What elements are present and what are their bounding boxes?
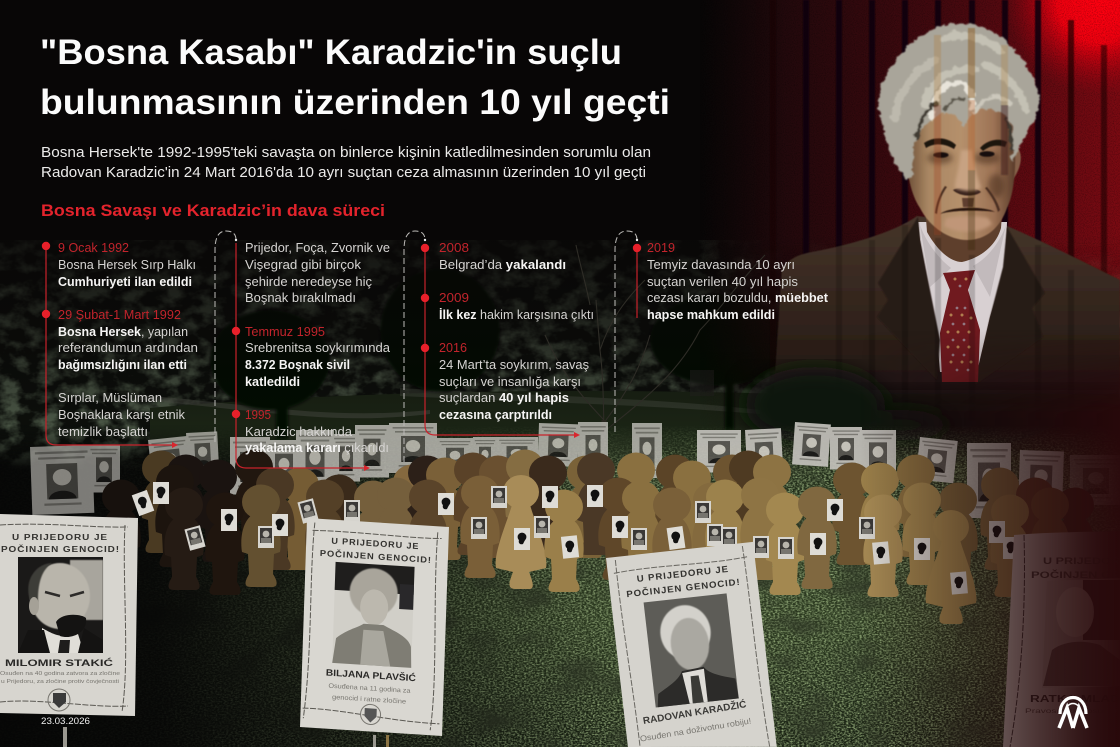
timeline column 2: şehirde neredeyse hiç [245,274,372,289]
timeline connectors [46,231,638,471]
timeline column 4: hapse mahkum edildi [647,307,775,322]
suit shadow fade at bottom [760,390,1120,470]
collar [920,225,1006,297]
poster: Biljana Plavšić: BILJANA PLAVŠIĆ [326,667,416,683]
title: bulunmasının üzerinden 10 yıl geçti [40,83,670,122]
timeline column 3: İlk kez hakim karşısına çıktı [439,307,594,322]
timeline column 4: 2019 [647,240,675,255]
shirt [918,222,1007,372]
timeline column 4 [647,240,829,322]
neck [925,200,1003,262]
timeline column 3: 24 Mart’ta soykırım, savaş [439,357,589,372]
photo [644,593,739,707]
timeline column 3: 2008 [439,240,469,255]
timeline column 2: 1995 [245,407,271,422]
timeline column 1: Cumhuriyeti ilan edildi [58,274,192,289]
timeline column 2: Srebrenitsa soykırımında [245,340,391,355]
timeline column 4: Temyiz davasında 10 ayrı [647,257,795,272]
poster: Milomir Stakić [0,514,138,716]
facial features [924,138,1007,232]
poster: Ratko Mladić: Pravosnažno osuđen [1025,709,1120,715]
title: "Bosna Kasabı" Karadzic'in suçlu [40,33,622,72]
timeline column 3: suçları ve insanlığa karşı [439,374,581,389]
timeline column 3: 2016 [439,340,467,355]
timeline column 2: Temmuz 1995 [245,324,325,339]
poster: Ratko Mladić: U PRIJEDOR [1043,556,1120,566]
face [906,97,1015,240]
timeline column 1: Sırplar, Müslüman [58,390,162,405]
subtitle: Radovan Karadzic'in 24 Mart 2016'da 10 ayrı suçtan ceza almasının üzerinden 10 yıl geçti [41,164,646,181]
section heading: Bosna Savaşı ve Karadzic’in dava süreci [41,201,385,220]
poster: Radovan Karadžić [606,542,777,747]
timeline column 2: katledildi [245,374,300,389]
photo [332,562,415,668]
dark fade over top of scene [0,0,800,440]
timeline column 4: cezası kararı bozuldu, müebbet [647,290,829,305]
timeline column 1 [58,240,198,439]
timeline column 1: 29 Şubat-1 Mart 1992 [58,307,181,322]
timeline column 1: referandumun ardından [58,340,198,355]
timeline column 3: suçlardan 40 yıl hapis [439,390,569,405]
bare tree [545,245,765,475]
poster: Radovan Karadžić: Osuđen na doživotnu robiju! [639,716,752,744]
timeline column 1: Bosna Hersek Sırp Halkı [58,257,196,272]
poster: Milomir Stakić: POČINJEN GENOCID! [1,543,120,554]
dark vertical bars behind portrait [802,0,1108,274]
tree foliage in front of suit [745,367,950,443]
timeline column 2: Boşnak bırakılmadı [245,290,356,305]
timeline column 1: Boşnaklara karşı etnik [58,407,185,422]
timeline column 1: bağımsızlığını ilan etti [58,357,187,372]
necktie [940,270,980,382]
right dark red overlay [860,330,1120,747]
subtitle [41,144,651,181]
title [40,33,670,122]
back row paper children silhouettes [101,450,1095,590]
portrait: Radovan Karadzic [760,23,1120,470]
timeline column 2: Karadzic hakkında [245,424,353,439]
timeline column 3: Belgrad’da yakalandı [439,257,566,272]
ears [902,145,1021,184]
suit lapels [877,217,1045,385]
photo cards on children [132,482,1019,595]
suit jacket [770,216,1120,450]
poster: Ratko Mladić [1003,531,1120,747]
poster: Biljana Plavšić: genocid i ratne zločine [332,694,407,706]
poster: Radovan Karadžić: POČINJEN GENOCID! [626,576,741,599]
timeline column 1: 9 Ocak 1992 [58,240,129,255]
timeline column 2: Vişegrad gibi birçok [245,257,361,272]
timeline column 4: suçtan verilen 40 yıl hapis [647,274,798,289]
poster: Ratko Mladić: RATKO MLAD [1030,694,1120,705]
background posters row [30,422,1120,518]
grass field [0,425,1120,747]
poster: Milomir Stakić: MILOMIR STAKIĆ [5,657,113,668]
front row paper children silhouettes [164,475,1070,624]
poster stakes [63,727,389,747]
timeline column 3 [439,240,594,422]
photo [1042,578,1120,688]
crest [48,689,70,711]
timeline column 2 [245,240,391,455]
timeline column 2: yakalama kararı çıkarıldı [245,440,389,455]
poster: Biljana Plavšić: POČINJEN GENOCID! [320,547,432,565]
icon: AA logo [1059,698,1087,728]
date stamp: 23.03.2026 [41,716,90,727]
poster: Milomir Stakić: Osuđen na 40 godina zatvora za zločine [0,671,120,677]
timeline column 3: 2009 [439,290,469,305]
tinted bars over portrait [836,28,1074,425]
crest [360,704,381,725]
background: park scene with trees and lawn [0,240,1120,470]
timeline column 1: temizlik başlattı [58,424,148,439]
grey hair [878,23,1039,180]
subtitle: Bosna Hersek'te 1992-1995'teki savaşta on binlerce kişinin katledilmesinden sorumlu olan [41,144,651,161]
red backdrop panel [728,0,1120,392]
poster: Radovan Karadžić: U PRIJEDORU JE [636,564,729,584]
timeline dots [42,242,641,418]
poster: Biljana Plavšić: Osuđena na 11 godina za [328,683,411,695]
timeline column 2: Prijedor, Foça, Zvornik ve [245,240,390,255]
poster: Milomir Stakić: u Prijedoru, za zločine protiv čovječnosti [1,679,119,685]
timeline column 3: cezasına çarptırıldı [439,407,552,422]
poster: Biljana Plavšić: U PRIJEDORU JE [331,536,419,551]
poster: Ratko Mladić: POČINJEN GE [1031,569,1120,580]
poster: Radovan Karadžić: RADOVAN KARADŽIĆ [642,698,747,727]
timeline column 2: 8.372 Boşnak sivil [245,357,350,372]
photo [18,557,103,653]
poster: Milomir Stakić: U PRIJEDORU JE [12,532,108,542]
timeline column 1: Bosna Hersek, yapılan [58,324,188,339]
poster: Biljana Plavšić [300,518,449,736]
